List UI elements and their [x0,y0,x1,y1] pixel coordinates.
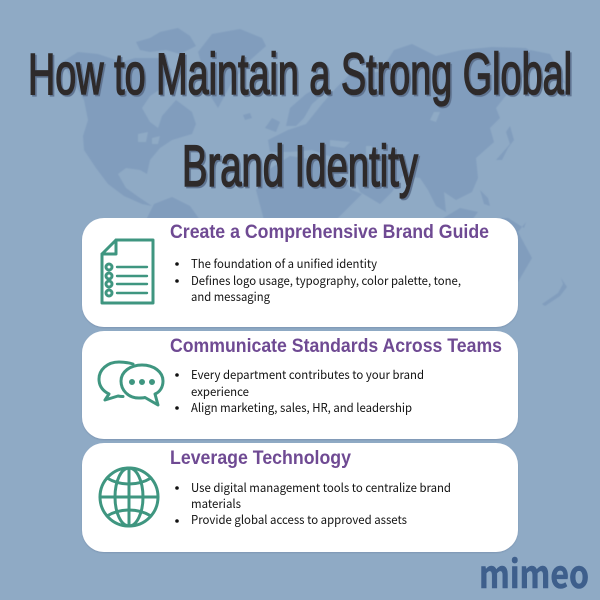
card background [82,331,518,439]
map: japan [496,126,514,160]
heading: Create a Comprehensive Brand Guide [170,221,489,243]
icon: globe [100,468,158,526]
panel: leverage technology [82,443,518,552]
bullet list: Use digital management tools to centralize brand [191,479,451,496]
bullet list [175,255,461,305]
card background [82,443,518,552]
title line 2: Brand Identity [182,134,418,199]
bullet list: Provide global access to approved assets [191,511,407,528]
map: kamchatka [522,50,566,84]
icon: document [102,240,153,303]
panel: communicate standards [82,331,518,439]
map: greenland [198,29,266,108]
map: africa [256,156,362,220]
bullet list [175,479,451,528]
bullet list: The foundation of a unified identity [191,255,377,272]
bullet list [175,366,424,416]
card background [82,218,518,327]
map: arctic islands [136,28,196,54]
map: scandinavia [286,84,326,126]
heading: Leverage Technology [170,447,351,469]
panel: brand guide [82,218,518,327]
bullet list: Every department contributes to your brand [191,366,424,383]
bullet list: and messaging [191,288,270,305]
bullet list: materials [191,495,241,512]
world map [62,28,567,306]
map: eurasia [268,44,546,212]
heading: Communicate Standards Across Teams [170,335,502,357]
bullet list: experience [191,383,249,400]
bullet list: Align marketing, sales, HR, and leadership [191,399,412,416]
map: inland water [138,112,440,158]
map: south america [146,197,200,220]
bullet list: Defines logo usage, typography, color palette, tone, [191,272,461,289]
icon: speech bubbles [99,362,163,405]
map: southeast asia [440,190,490,220]
map: australia [500,218,532,282]
map: north america [62,52,196,206]
map: new zealand [542,278,567,306]
map: iceland and uk [243,113,280,132]
title [28,42,572,199]
